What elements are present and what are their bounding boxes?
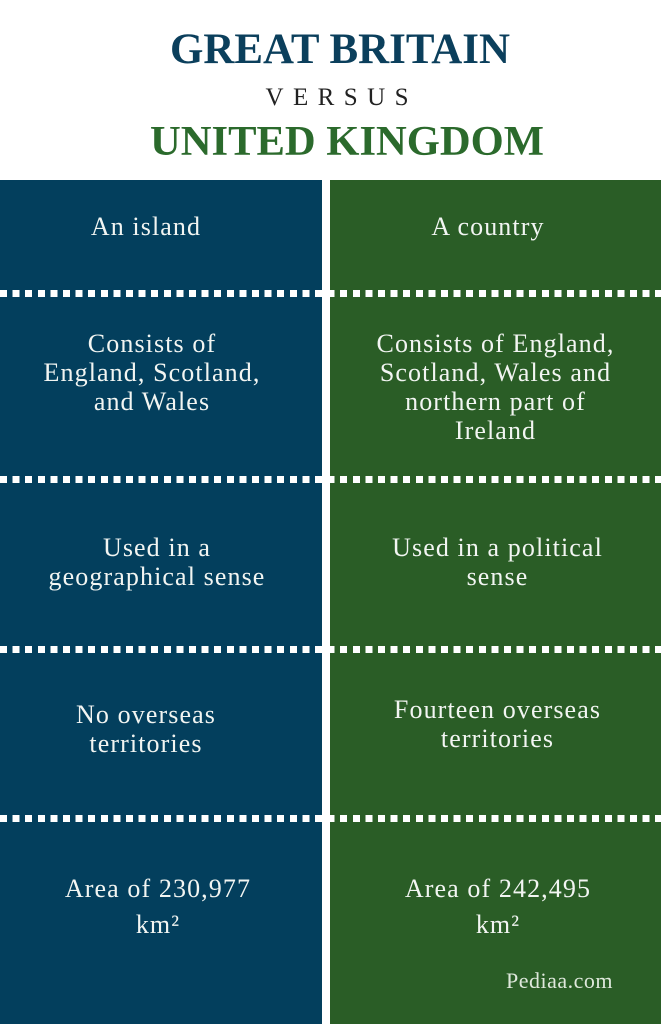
text: no territories: territories (89, 729, 203, 758)
text: no territories (76, 700, 216, 758)
heading: versus: VERSUS (266, 84, 408, 111)
text: geographical: Used in a (103, 533, 211, 562)
heading: united kingdom: UNITED KINGDOM (150, 119, 544, 165)
text: political: sense (467, 562, 528, 591)
heading: great britain: GREAT BRITAIN (170, 26, 510, 73)
text: gb area (65, 874, 251, 939)
text: fourteen territories (394, 695, 601, 753)
text: gb consists: and Wales (94, 387, 210, 416)
text: uk area: km² (476, 910, 520, 939)
text: geographical: geographical sense (49, 562, 265, 591)
text: uk consists: Consists of England, (377, 329, 614, 358)
text: gb consists (44, 329, 260, 416)
text: uk consists: Ireland (455, 416, 536, 445)
text: no territories: No overseas (76, 700, 216, 729)
logo: pediaa.com: Pediaa.com (506, 968, 613, 993)
panel: great britain column (0, 180, 322, 1024)
text: uk consists (377, 329, 614, 445)
panel: united kingdom column (330, 180, 661, 1024)
text: uk area (405, 874, 591, 939)
text: uk consists: Scotland, Wales and (380, 358, 611, 387)
text: political (392, 533, 603, 591)
text: fourteen territories: territories (441, 724, 554, 753)
text: fourteen territories: Fourteen overseas (394, 695, 601, 724)
text: gb consists: England, Scotland, (44, 358, 260, 387)
text: gb area: km² (136, 910, 180, 939)
text: uk area: Area of 242,495 (405, 874, 591, 903)
title (150, 26, 544, 165)
text: political: Used in a political (392, 533, 603, 562)
text: geographical (49, 533, 265, 591)
text: an island: An island (91, 212, 201, 241)
text: gb area: Area of 230,977 (65, 874, 251, 903)
text: gb consists: Consists of (88, 329, 216, 358)
text: uk consists: northern part of (405, 387, 586, 416)
text: a country: A country (431, 212, 545, 241)
